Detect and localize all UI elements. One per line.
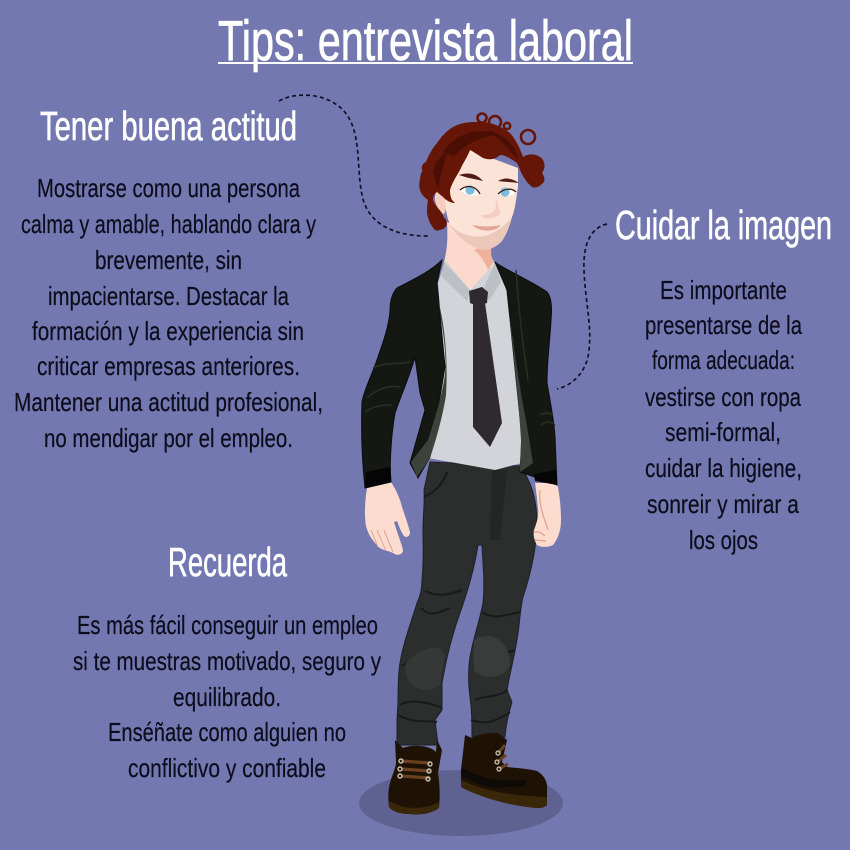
- text block: image advice: semi-formal,: [665, 417, 781, 447]
- text block: image advice: [645, 275, 802, 555]
- jacket left side: [362, 260, 447, 488]
- left hand: [365, 482, 410, 555]
- right boot: [461, 733, 547, 808]
- text block: attitude advice: impacientarse. Destacar la: [48, 281, 289, 311]
- text block: attitude advice: Mantener una actitud profesional,: [14, 387, 323, 417]
- text block: reminder: conflictivo y confiable: [128, 753, 326, 783]
- text block: attitude advice: formación y la experiencia sin: [32, 316, 304, 346]
- panel: cuidar la imagen: [615, 202, 832, 555]
- shirt: [428, 260, 522, 470]
- text block: image advice: presentarse de la: [645, 310, 802, 340]
- ground shadow: [359, 770, 563, 836]
- title: Tips: entrevista laboral: [218, 9, 633, 73]
- neck: [444, 222, 495, 292]
- panel: recuerda: [73, 539, 381, 783]
- text block: attitude advice: [14, 173, 323, 453]
- heading: recuerda: Recuerda: [168, 539, 287, 585]
- text block: attitude advice: criticar empresas anteriores.: [37, 351, 300, 381]
- text block: reminder: Es más fácil conseguir un empleo: [77, 610, 378, 640]
- heading: tener buena actitud: Tener buena actitud: [40, 103, 297, 149]
- eyebrows: [459, 173, 519, 183]
- illustration: man in suit: [359, 114, 563, 836]
- dashed connector: attitude: [279, 95, 428, 236]
- text block: image advice: los ojos: [689, 525, 758, 555]
- text block: reminder: [73, 610, 381, 783]
- trousers: [397, 462, 537, 745]
- face: [445, 150, 518, 250]
- dashed connector: image: [557, 224, 607, 389]
- left boot: [388, 740, 442, 814]
- mouth: [472, 225, 501, 231]
- text block: image advice: forma adecuada:: [652, 345, 795, 375]
- text block: image advice: Es importante: [660, 275, 787, 305]
- necktie: [469, 287, 502, 447]
- text block: image advice: vestirse con ropa: [645, 382, 801, 412]
- collar: [441, 262, 501, 301]
- text block: image advice: cuidar la higiene,: [645, 453, 802, 483]
- text block: attitude advice: Mostrarse como una persona: [37, 173, 300, 203]
- right hand: [534, 483, 561, 547]
- text block: attitude advice: no mendigar por el empleo.: [44, 423, 293, 453]
- jacket right side: [495, 262, 557, 485]
- eyes: [460, 185, 516, 197]
- nose: [481, 196, 500, 218]
- text block: image advice: sonreir y mirar a: [647, 489, 799, 519]
- hair: [419, 114, 545, 231]
- text block: reminder: equilibrado.: [173, 682, 281, 712]
- text block: reminder: Enséñate como alguien no: [108, 717, 346, 747]
- text block: attitude advice: brevemente, sin: [95, 245, 242, 275]
- ear: [435, 192, 446, 214]
- panel: tener buena actitud: [14, 103, 323, 453]
- text block: attitude advice: calma y amable, hablando clara y: [21, 209, 316, 239]
- text block: reminder: si te muestras motivado, seguro y: [73, 646, 381, 676]
